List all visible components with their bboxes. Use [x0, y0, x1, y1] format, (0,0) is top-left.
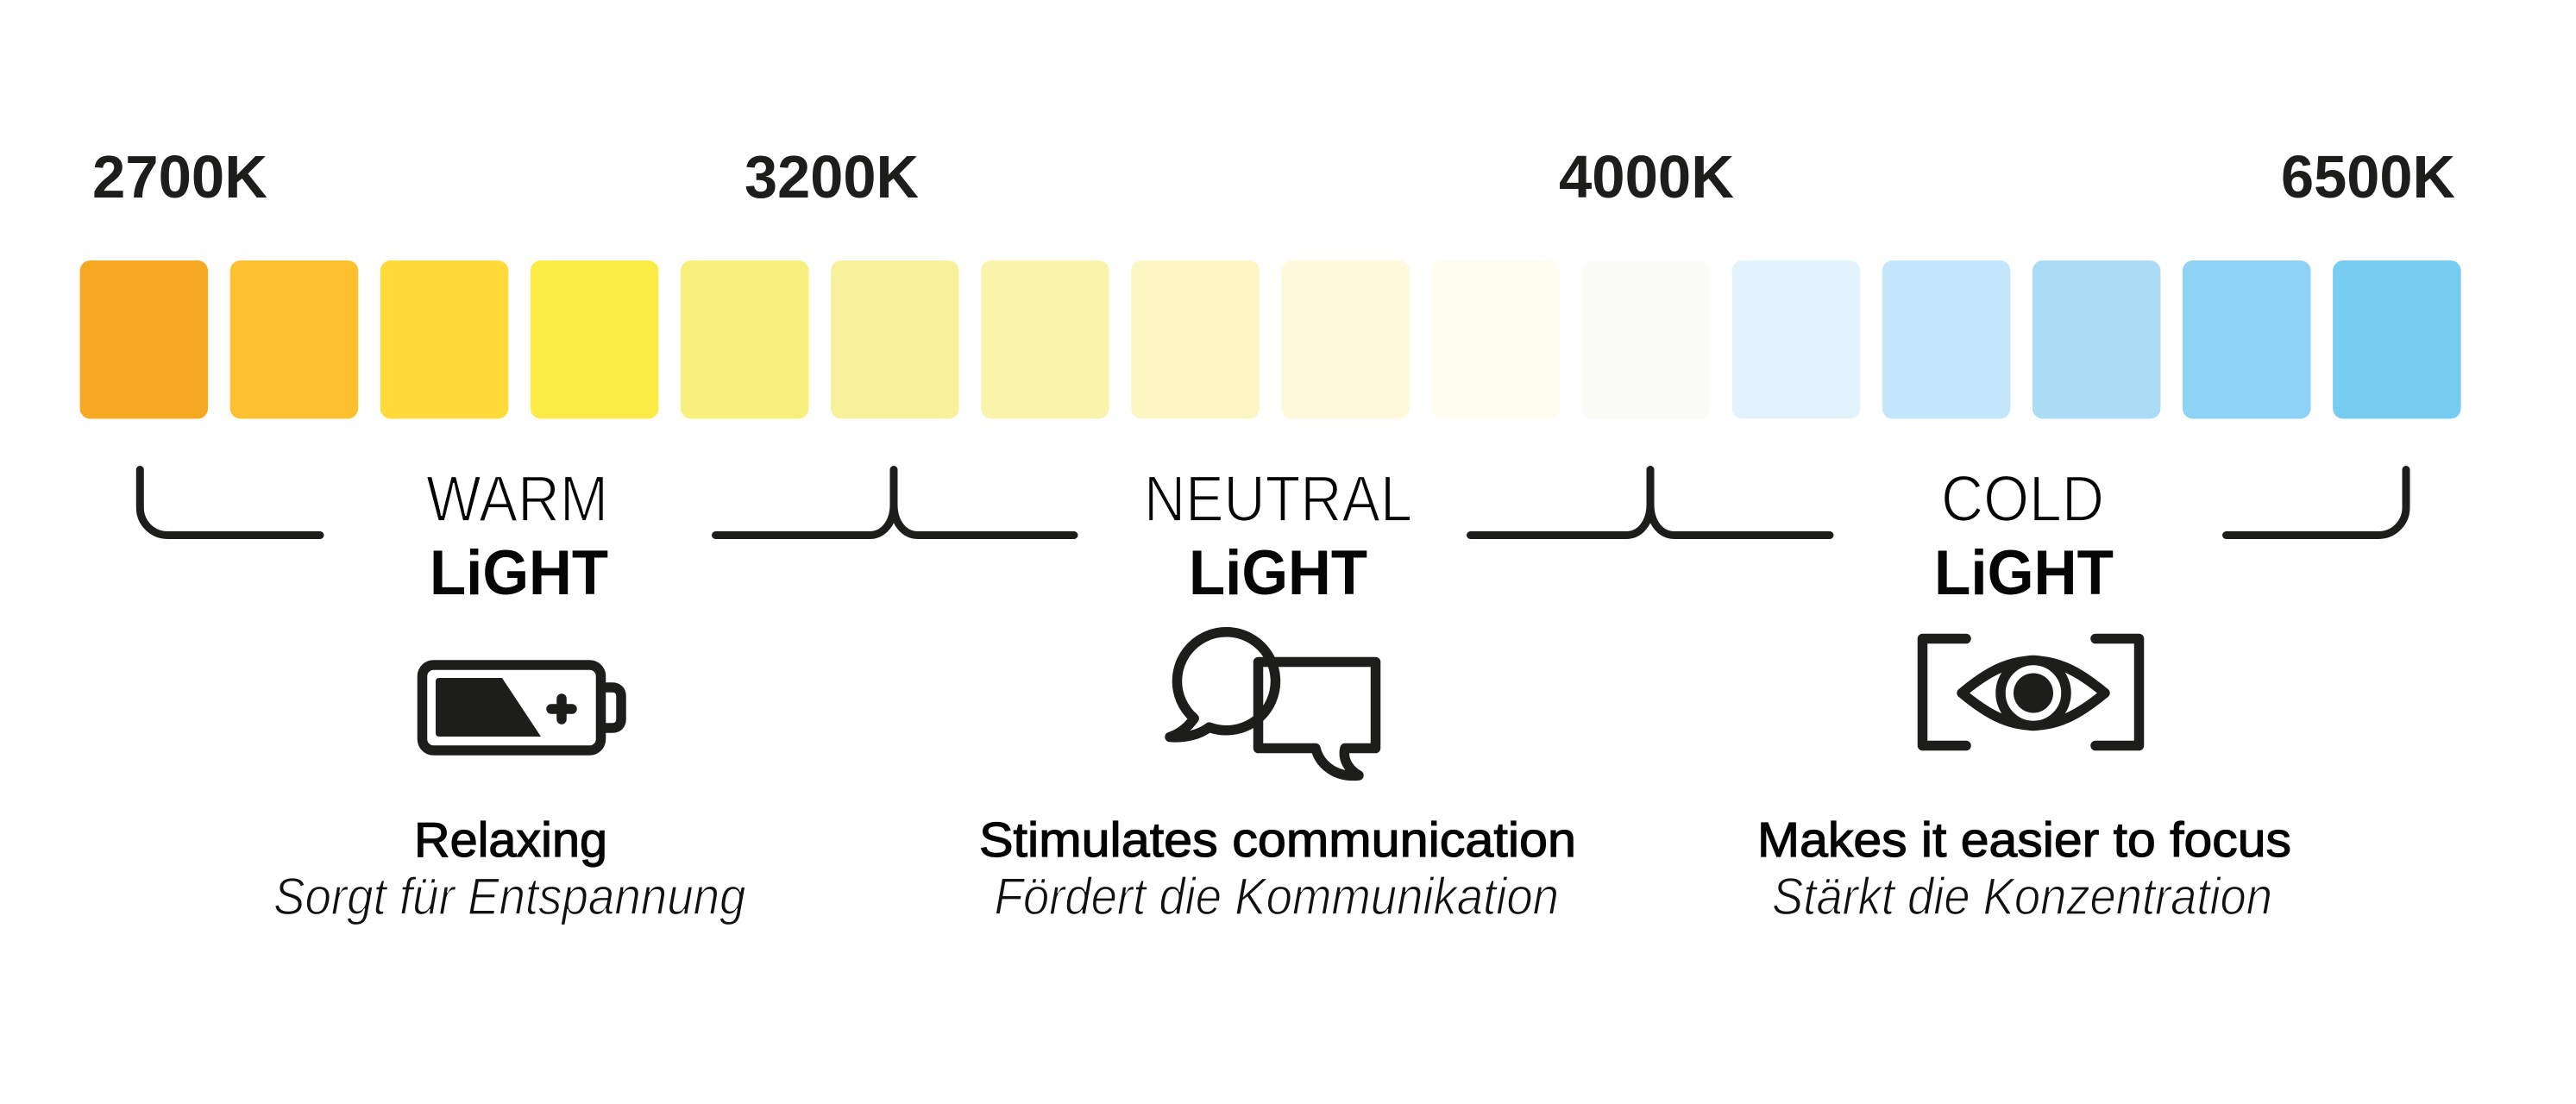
bracket: warm start — [140, 469, 320, 535]
heading: neutral light: NEUTRAL — [1144, 462, 1412, 535]
text: makes it easier to focus: Makes it easier to focus — [1757, 812, 2291, 868]
heading: neutral light: LiGHT — [1189, 538, 1367, 608]
heading: cold light: LiGHT — [1934, 538, 2114, 608]
label: 4000K: 4000K — [1559, 143, 1734, 210]
range brackets — [140, 469, 2406, 535]
text: stimulates communication — [979, 812, 1576, 925]
label: 2700K: 2700K — [92, 143, 267, 210]
label: 3200K: 3200K — [745, 143, 919, 210]
text: relaxing — [273, 812, 745, 925]
bracket: cold end — [2226, 469, 2406, 535]
brace: neutral to cold — [1470, 469, 1830, 535]
heading: warm light — [426, 462, 608, 608]
text: stimulates communication: Fördert die Kommunikation — [994, 868, 1559, 925]
kelvin labels — [92, 143, 2455, 210]
brace: warm to neutral — [716, 469, 1074, 535]
heading: cold light — [1934, 462, 2114, 608]
icon: eye in focus brackets — [1922, 638, 2139, 745]
heading: warm light: WARM — [426, 462, 608, 535]
panel: warm light — [273, 462, 745, 925]
text: relaxing: Relaxing — [414, 812, 607, 868]
text: makes it easier to focus: Stärkt die Konzentration — [1772, 868, 2272, 925]
panel: neutral light — [979, 462, 1576, 925]
label: 6500K: 6500K — [2281, 143, 2455, 210]
text: makes it easier to focus — [1757, 812, 2291, 925]
icon: battery — [423, 665, 621, 750]
icon: speech bubbles — [1170, 632, 1375, 775]
heading: cold light: COLD — [1941, 462, 2104, 535]
heading: neutral light — [1144, 462, 1412, 608]
text: relaxing: Sorgt für Entspannung — [273, 868, 745, 925]
colour temperature swatch scale — [80, 260, 2461, 419]
text: stimulates communication: Stimulates communication — [979, 812, 1576, 868]
panel: cold light — [1757, 462, 2291, 925]
heading: warm light: LiGHT — [430, 538, 608, 608]
